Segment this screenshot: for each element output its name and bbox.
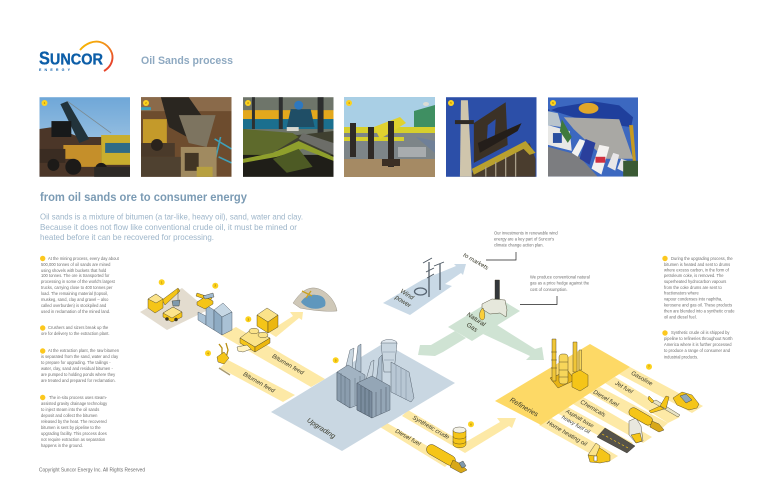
text block: step 3 extraction: are treated and prepared for reclamation. bbox=[41, 378, 116, 383]
flow labels: Gas bbox=[465, 322, 479, 334]
text block: step 5 upgrading: fractionators where bbox=[664, 290, 700, 296]
icon: upgrading towers bbox=[337, 340, 414, 418]
logo: Suncor Energy: SUNCOR bbox=[39, 48, 103, 68]
text block: step 1 mining: processing in some of the world's largest bbox=[41, 279, 116, 284]
callout: natural gas hedge: gas as a price hedge against the bbox=[530, 280, 590, 286]
icon: chemical truck bbox=[629, 418, 643, 443]
photo 6: service station bbox=[548, 97, 638, 177]
flow labels: Natural bbox=[465, 311, 487, 329]
text block: step 1 mining: used in reclamation of the mined land. bbox=[41, 309, 110, 314]
callout: wind investment bbox=[486, 230, 558, 260]
text block: step 1 mining: called overburden) is stockpiled and bbox=[41, 303, 107, 308]
text block: step 5 upgrading bbox=[662, 256, 735, 320]
arrow: natural gas to upgrading bbox=[418, 331, 466, 356]
callout: wind investment: energy are a key part of Suncor's bbox=[494, 236, 554, 242]
callout: natural gas hedge: cost of consumption. bbox=[530, 287, 568, 292]
refineries platform bbox=[495, 344, 630, 425]
text block: step 1 mining: 100 tonnes. The ore is transported for bbox=[41, 273, 110, 278]
diagram step markers: 1 bbox=[161, 280, 163, 284]
callout: natural gas hedge bbox=[520, 274, 590, 304]
text block: step 1 mining bbox=[40, 256, 120, 314]
arrow: wind power to markets bbox=[383, 264, 466, 315]
icon: road bbox=[597, 428, 635, 453]
text block: step 2 crushers: ore for delivery to the extraction plant. bbox=[41, 331, 110, 336]
flow labels: heavy fuel oil bbox=[560, 415, 591, 436]
logo: Suncor Energy bbox=[39, 42, 113, 72]
flow labels: Asphalt base bbox=[564, 408, 594, 430]
product bands bbox=[539, 367, 703, 463]
photo number markers: 1 bbox=[44, 101, 46, 105]
photo number markers: 2 bbox=[145, 101, 147, 105]
text block: step 5 upgrading: kerosene and gas oil. These products bbox=[664, 302, 732, 308]
natural gas platform bbox=[448, 297, 520, 341]
flow labels: Home heating oil bbox=[546, 420, 588, 448]
flow labels: power bbox=[393, 294, 413, 310]
text block: step 1 mining: load. The remaining material (topsoil, bbox=[41, 291, 108, 296]
text block: step 1 mining: muskeg, sand, clay and gravel – also bbox=[41, 297, 109, 302]
text block: step 1 mining: At the mining process, every day about bbox=[48, 256, 120, 261]
text block: step 6 refining: pipeline to refineries throughout North bbox=[664, 336, 733, 341]
text block: step 4 in-situ: happens in the ground. bbox=[41, 443, 83, 448]
diagram step markers: 5 bbox=[335, 358, 337, 362]
intro paragraph: Oil sands is a mixture of bitumen (a tar-like, heavy oil), sand, water and clay. bbox=[40, 212, 303, 222]
text block: step 3 extraction bbox=[40, 348, 120, 383]
text block: step 5 upgrading: from the coke drums are sent to bbox=[664, 285, 723, 290]
photo number markers bbox=[42, 100, 556, 106]
flow labels: Diesel fuel bbox=[394, 429, 422, 448]
band: diesel fuel bbox=[380, 423, 452, 467]
text block: step 3 extraction: to prepare for upgrading. The tailings - bbox=[41, 360, 111, 365]
icon: crusher building bbox=[198, 303, 232, 335]
text block: step 3 extraction: At the extraction plant, the raw bitumen bbox=[48, 348, 120, 353]
icon: house bbox=[588, 443, 610, 463]
text block: step 1 mining: using shovels with buckets that hold bbox=[41, 268, 107, 273]
text block: step 5 upgrading: superheated hydrocarbon vapours bbox=[664, 279, 726, 284]
photo 3: extraction worker and cone bbox=[243, 97, 334, 177]
icon: fuel tanker bbox=[627, 406, 664, 432]
arrow: natural gas to refineries bbox=[483, 325, 544, 360]
intro paragraph bbox=[40, 212, 303, 242]
arrow: tailings to pond bbox=[268, 312, 303, 337]
flow labels: Jet fuel bbox=[613, 380, 634, 396]
text block: step 4 in-situ: to inject steam into the oil sands bbox=[41, 407, 99, 412]
diagram step markers: 6 bbox=[470, 422, 472, 426]
flow labels: to markets bbox=[462, 253, 489, 272]
flow labels bbox=[242, 253, 654, 448]
text block: step 1 mining: 500,000 tonnes of oil sands are mined bbox=[41, 262, 111, 267]
text block: step 6 refining: industrial products. bbox=[664, 354, 698, 360]
upgrading platform bbox=[271, 343, 455, 451]
intro paragraph: Because it does not flow like conventional crude oil, it must be mined or bbox=[40, 222, 297, 232]
photo number markers: 4 bbox=[348, 101, 350, 105]
text block: step 4 in-situ: released by the heat. The recovered bbox=[41, 419, 107, 424]
intro paragraph: heated before it can be recovered for processing. bbox=[40, 232, 214, 242]
photo 2: crusher and hopper bbox=[141, 97, 232, 177]
callout: natural gas hedge: We produce conventional natural bbox=[530, 274, 590, 280]
logo: Suncor Energy: ENERGY bbox=[39, 68, 71, 72]
text block: step 5 upgrading: then are blended into a synthetic crude bbox=[664, 308, 735, 314]
text block: step 4 in-situ bbox=[40, 395, 108, 448]
text block: step 4 in-situ: upgrading facility. This process does bbox=[41, 431, 107, 436]
text block: step 3 extraction: is separated from the sand, water and clay bbox=[41, 354, 119, 359]
text block: step 4 in-situ: assisted gravity drainage technology bbox=[41, 401, 108, 406]
flow labels: Chemicals bbox=[579, 400, 606, 419]
icon: oil barrel bbox=[453, 427, 466, 448]
callout: wind investment: climate change action plan. bbox=[494, 242, 544, 248]
text block: step 5 upgrading: vapour condenses into naphtha, bbox=[664, 296, 722, 302]
icon: in-situ rig bbox=[217, 343, 230, 375]
title: Oil Sands process bbox=[141, 55, 233, 67]
text block: step 4 in-situ: deposit and collect the bitumen bbox=[41, 413, 98, 418]
photo number markers: 6 bbox=[552, 101, 554, 105]
text block: step 1 mining: trucks, carrying close to 400 tonnes per bbox=[41, 285, 113, 290]
text block: step 2 crushers: Crushers and sizers break up the bbox=[48, 325, 109, 330]
mining platform bbox=[140, 288, 208, 330]
text block: step 6 refining bbox=[662, 330, 733, 360]
diagram step markers: 7 bbox=[648, 365, 650, 369]
text block: step 5 upgrading: bitumen is heated and sent to drums bbox=[664, 262, 730, 267]
icon: crusher digger bbox=[196, 293, 214, 309]
photo 4: in-situ well site bbox=[344, 97, 435, 177]
text block: step 3 extraction: water, clay, sand and residual bitumen - bbox=[41, 366, 113, 371]
callout: wind investment: Our investments in renewable wind bbox=[494, 230, 558, 236]
icon: natural gas well bbox=[479, 280, 507, 320]
text block: step 4 in-situ: not require extraction as separation bbox=[41, 437, 106, 442]
band: bitumen feed upper bbox=[221, 327, 325, 387]
icon: refinery towers bbox=[550, 339, 588, 391]
text block: step 5 upgrading: During the upgrading process, the bbox=[671, 256, 733, 261]
heading: from oil sands ore to consumer energy bbox=[40, 190, 247, 204]
text block: step 4 in-situ: bitumen is sent by pipeline to the bbox=[41, 425, 101, 430]
diagram step markers bbox=[159, 279, 652, 427]
flow labels: Refineries bbox=[508, 397, 540, 419]
flow labels: Synthetic crude bbox=[411, 415, 450, 441]
copyright: Copyright Suncor Energy Inc. All Rights Reserved bbox=[39, 468, 145, 474]
icon: tailings pond bbox=[293, 288, 337, 311]
photo 1: mining shovel and truck bbox=[40, 97, 130, 177]
text block: step 3 extraction: are pumped to holding ponds where they bbox=[41, 372, 116, 377]
text block: step 6 refining: America where it is further processed bbox=[664, 342, 732, 347]
icon: extraction plant bbox=[237, 308, 278, 352]
diagram step markers: 2 bbox=[214, 284, 216, 288]
flow labels: Bitumen feed bbox=[242, 372, 276, 395]
icon: car bbox=[673, 392, 699, 410]
icon: diesel tanker truck bbox=[425, 443, 467, 473]
text block: step 6 refining: Synthetic crude oil is shipped by bbox=[671, 330, 730, 335]
flow labels: Diesel fuel bbox=[592, 390, 620, 409]
flow labels: Upgrading bbox=[305, 417, 336, 441]
flow labels: Bitumen feed bbox=[271, 354, 305, 377]
band: synthetic crude with arrow to refineries bbox=[402, 410, 516, 453]
photo number markers: 3 bbox=[247, 101, 249, 105]
flow labels: Gasoline bbox=[630, 371, 654, 388]
text block: step 6 refining: to produce a range of consumer and bbox=[664, 348, 731, 353]
photo number markers: 5 bbox=[450, 101, 452, 105]
text block: step 5 upgrading: oil and diesel fuel. bbox=[664, 314, 697, 320]
icon: wind turbines bbox=[414, 258, 444, 297]
diagram step markers: 4 bbox=[207, 351, 209, 355]
text block: step 4 in-situ: The in-situ process uses steam- bbox=[49, 395, 108, 400]
text block: step 5 upgrading: where excess carbon, in the form of bbox=[664, 268, 730, 272]
text block: step 2 crushers bbox=[40, 325, 110, 336]
photo 5: upgrading stack and coker structure bbox=[446, 97, 536, 177]
icon: mining shovel and truck bbox=[148, 288, 182, 322]
icon: jet plane bbox=[648, 396, 680, 417]
diagram step markers: 3 bbox=[247, 317, 249, 321]
band: bitumen feed lower bbox=[220, 360, 295, 402]
text block: step 5 upgrading: petroleum coke, is removed. The bbox=[664, 273, 724, 278]
flow labels: Wind bbox=[399, 288, 415, 302]
